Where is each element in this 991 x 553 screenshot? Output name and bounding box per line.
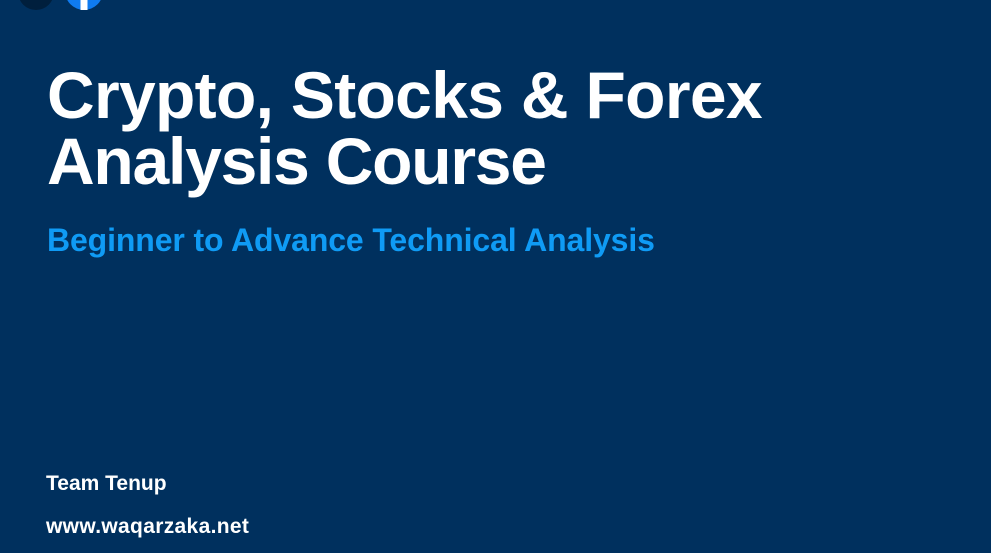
icon: blue circle with white bar	[67, 0, 101, 10]
subtitle: Beginner to Advance Technical Analysis	[47, 222, 655, 258]
icon: dark circle	[18, 0, 54, 10]
title: Analysis Course	[47, 124, 546, 198]
author: Team Tenup	[46, 472, 167, 495]
website: www.waqarzaka.net	[46, 515, 249, 538]
title	[47, 58, 762, 198]
title: Crypto, Stocks & Forex	[47, 58, 762, 132]
